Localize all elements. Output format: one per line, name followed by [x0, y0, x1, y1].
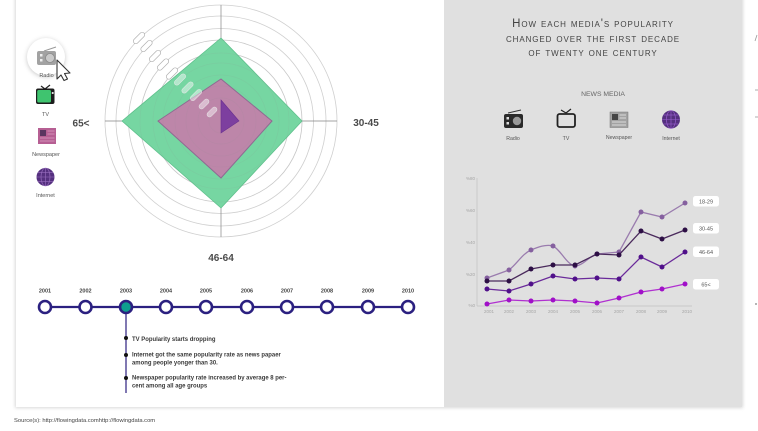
left selector: TV: TV: [42, 112, 49, 118]
series tag: 18-29: 18-29: [699, 200, 713, 206]
source: Source(s): http://flowingdata.comhttp://flowingdata.com: [14, 418, 155, 424]
left selector: radio (active): [27, 38, 65, 79]
radar shape: purple: [221, 100, 239, 133]
series tag: 65<: 65<: [701, 282, 711, 288]
right panel title: [506, 18, 680, 59]
timeline years: 2002: [79, 288, 92, 294]
y axis labels: [466, 176, 475, 308]
news media heading: NEWS MEDIA: [581, 91, 625, 98]
radar label: 30-45: 30-45: [353, 118, 379, 129]
timeline years: 2007: [281, 288, 293, 294]
radar label: 65<: 65<: [73, 118, 90, 130]
radar label: 46-64: 46-64: [208, 253, 234, 264]
next slide edge fragment: [755, 35, 758, 305]
timeline notes for 2003: Newspaper popularity rate increased by average 8 per-: [132, 376, 286, 382]
x axis labels: 2003: [526, 309, 537, 314]
x axis labels: 2002: [504, 309, 515, 314]
left selector: newspaper: Newspaper: [32, 152, 60, 158]
left selector: TV: [36, 85, 54, 118]
timeline years: 2008: [321, 288, 333, 294]
radar chart: [105, 5, 337, 237]
series tag: 46-64: [693, 246, 719, 257]
timeline: [39, 288, 414, 393]
series tag: 30-45: [693, 223, 719, 234]
y axis labels: %0: [468, 303, 475, 308]
icon: newspaper: Newspaper: [606, 135, 632, 141]
radar shape: pink: [158, 79, 272, 178]
timeline years: 2006: [241, 288, 253, 294]
y axis labels: %60: [466, 208, 475, 213]
icon: TV: TV: [563, 136, 570, 142]
series tag: 30-45: 30-45: [699, 226, 713, 232]
timeline years: 2003: [120, 288, 132, 294]
right panel title: changed over the first decade: [506, 33, 680, 45]
icon: internet: [662, 110, 680, 142]
y axis labels: %80: [466, 176, 475, 181]
right panel title: How each media's popularity: [512, 18, 674, 30]
timeline years: 2010: [402, 288, 414, 294]
timeline years: [39, 288, 414, 294]
line chart: [466, 176, 693, 314]
icon: radio: Radio: [506, 136, 520, 142]
icon: internet: Internet: [662, 136, 680, 142]
icon: newspaper: [606, 112, 632, 141]
timeline active marker: 2003: [120, 301, 132, 313]
chart axes: [477, 178, 692, 306]
timeline notes for 2003: TV Popularity starts dropping: [132, 337, 216, 343]
x axis labels: 2006: [592, 309, 603, 314]
left selector: internet: [36, 168, 55, 199]
timeline notes for 2003: cent among all age groups: [132, 384, 208, 390]
series tag: 46-64: 46-64: [699, 250, 713, 256]
icon: radio: [504, 110, 523, 142]
x axis labels: 2007: [614, 309, 625, 314]
radar shape: green: [122, 38, 302, 208]
y axis labels: %20: [466, 272, 475, 277]
timeline years: 2004: [160, 288, 173, 294]
series tag: 18-29: [693, 196, 719, 206]
timeline notes for 2003: [124, 336, 286, 390]
x axis labels: [484, 309, 693, 314]
series tag: 65<: [693, 279, 719, 290]
timeline notes for 2003: Internet got the same popularity rate as news papaer: [132, 352, 281, 358]
series: 65<: [484, 282, 688, 306]
x axis labels: 2008: [636, 309, 647, 314]
timeline notes for 2003: among people yonger than 30.: [132, 360, 218, 366]
y axis labels: %40: [466, 240, 475, 245]
series: 18-29: [484, 200, 688, 280]
cursor arrow icon: [57, 60, 70, 80]
left selector: newspaper: [32, 128, 60, 158]
x axis labels: 2004: [548, 309, 559, 314]
timeline years: 2005: [200, 288, 212, 294]
x axis labels: 2009: [657, 309, 668, 314]
right panel title: of twenty one century: [528, 47, 658, 59]
timeline years: 2001: [39, 288, 51, 294]
timeline years: 2009: [362, 288, 374, 294]
panel: right grey panel: [444, 0, 742, 407]
left selector: internet: Internet: [36, 193, 55, 199]
series: 46-64: [484, 250, 688, 294]
x axis labels: 2010: [682, 309, 693, 314]
x axis labels: 2005: [570, 309, 581, 314]
series: 30-45: [484, 228, 688, 284]
icon: TV: [558, 109, 575, 142]
left selector: radio (active): Radio: [39, 73, 54, 79]
x axis labels: 2001: [484, 309, 495, 314]
ring scale pills: [132, 31, 179, 80]
